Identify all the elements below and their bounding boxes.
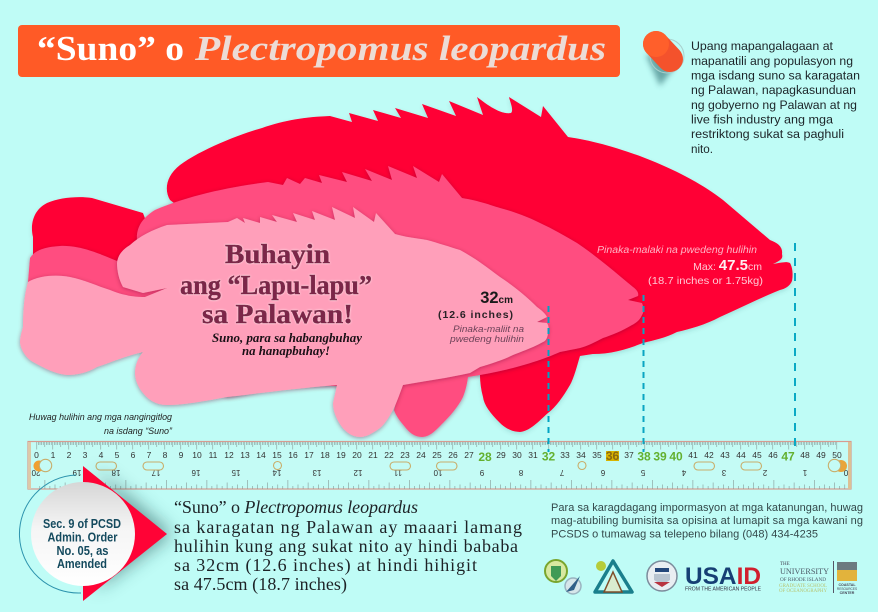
intro paragraph: mapanatili ang populasyon ng xyxy=(691,54,853,68)
ruler centimetre numbers: 21 xyxy=(368,450,378,460)
ruler centimetre numbers: 44 xyxy=(736,450,746,460)
ruler centimetre numbers: 12 xyxy=(224,450,234,460)
ruler slots and holes xyxy=(34,459,847,472)
campaign headline: Suno, para sa habangbuhay xyxy=(212,331,362,345)
label: minimum size 32cm: Pinaka-maliit na xyxy=(453,324,524,335)
contact information: PCSDS o tumawag sa telepeno bilang (048) 434-4235 xyxy=(551,528,818,540)
regulation text: sa 47.5cm (18.7 inches) xyxy=(174,574,347,595)
logo: University of Rhode Island xyxy=(779,561,834,594)
ruler inch numbers, upside down: 9 xyxy=(479,468,484,477)
badge: legal reference xyxy=(19,466,172,601)
ruler inch numbers, upside down: 10 xyxy=(433,468,442,477)
ruler inch numbers, upside down: 15 xyxy=(231,468,240,477)
ruler inch numbers, upside down: 13 xyxy=(312,468,321,477)
ruler centimetre numbers: 39 xyxy=(653,450,667,464)
logo: Coastal Resources Center: RESOURCES xyxy=(837,587,857,591)
fish: middle silhouette xyxy=(28,166,644,437)
ruler centimetre numbers: 7 xyxy=(147,450,152,460)
note above ruler xyxy=(29,412,173,437)
intro paragraph: restriktong sukat sa paghuli xyxy=(691,127,844,141)
ruler centimetre numbers: 17 xyxy=(304,450,314,460)
note above ruler: Huwag hulihin ang mga nangingitlog xyxy=(29,412,173,423)
ruler centimetre numbers: 9 xyxy=(179,450,184,460)
ruler inch numbers, upside down: 3 xyxy=(721,468,726,477)
title banner xyxy=(18,25,620,77)
logo: Coastal Resources Center: CENTER xyxy=(840,591,855,595)
logo: University of Rhode Island: OF RHODE ISLAND xyxy=(780,577,826,583)
ruler centimetre numbers: 32 xyxy=(542,450,555,464)
badge: legal reference: Amended xyxy=(57,557,107,571)
ruler inch numbers, upside down: 16 xyxy=(191,468,200,477)
badge: legal reference: No. 05, as xyxy=(56,544,109,558)
ruler centimetre numbers: 10 xyxy=(192,450,202,460)
intro paragraph xyxy=(691,39,860,156)
fish: smallest silhouette 32cm xyxy=(20,207,549,437)
ruler inch numbers, upside down: 8 xyxy=(518,468,523,477)
ruler centimetre numbers: 27 xyxy=(464,450,474,460)
ruler centimetre numbers: 6 xyxy=(131,450,136,460)
logo: Coastal Resources Center xyxy=(837,562,857,595)
ruler centimetre numbers: 45 xyxy=(752,450,762,460)
ruler centimetre numbers: 43 xyxy=(720,450,730,460)
ruler inch numbers, upside down: 11 xyxy=(393,468,402,477)
logo: University of Rhode Island: THE xyxy=(780,562,790,567)
contact information: mag-atubiling bumisita sa opisina at lumapit sa mga kawani ng xyxy=(551,515,863,527)
intro paragraph: ng Palawan, napagkasunduan xyxy=(691,83,856,97)
ruler inch numbers, upside down: 19 xyxy=(72,468,81,477)
ruler xyxy=(28,442,851,489)
ruler centimetre numbers: 35 xyxy=(592,450,602,460)
ruler centimetre numbers: 11 xyxy=(209,450,218,460)
title banner: “Suno” o xyxy=(37,29,184,68)
title banner: Plectropomus leopardus xyxy=(194,29,606,68)
ruler centimetre numbers: 25 xyxy=(432,450,442,460)
regulation text: sa 32cm (12.6 inches) at hindi hihigit xyxy=(174,555,477,576)
ruler centimetre numbers: 8 xyxy=(163,450,168,460)
ruler centimetre numbers: 20 xyxy=(352,450,362,460)
intro paragraph: Upang mapangalagaan at xyxy=(691,39,834,53)
ruler centimetre numbers: 28 xyxy=(478,450,492,464)
ruler centimetre numbers: 40 xyxy=(669,450,683,464)
ruler centimetre numbers: 2 xyxy=(67,450,72,460)
contact information xyxy=(551,502,863,540)
ruler centimetre numbers xyxy=(34,449,842,464)
regulation text: sa karagatan ng Palawan ay maaari lamang xyxy=(174,517,522,537)
logo: USAID: USAID xyxy=(685,563,761,590)
ruler centimetre numbers: 49 xyxy=(816,450,826,460)
ruler centimetre numbers: 42 xyxy=(704,450,714,460)
logo: University of Rhode Island: UNIVERSITY xyxy=(780,566,829,576)
ruler inch numbers, upside down: 12 xyxy=(353,468,362,477)
label: maximum size 47.5cm: (18.7 inches or 1.75kg) xyxy=(648,275,763,287)
ruler inch numbers, upside down: 20 xyxy=(31,468,40,477)
ruler inch numbers, upside down: 18 xyxy=(111,468,120,477)
ruler centimetre numbers: 19 xyxy=(336,450,346,460)
ruler inch numbers, upside down: 7 xyxy=(559,468,564,477)
regulation text: “Suno” o Plectropomus leopardus xyxy=(174,497,418,517)
ruler inch numbers, upside down: 17 xyxy=(151,468,160,477)
campaign headline: na hanapbuhay! xyxy=(242,344,330,358)
ruler centimetre numbers: 4 xyxy=(99,450,104,460)
label: minimum size 32cm: 32cm xyxy=(480,289,513,307)
label: minimum size 32cm: pwedeng hulihin xyxy=(449,334,524,345)
ruler inch numbers, upside down: 2 xyxy=(762,468,767,477)
ruler centimetre numbers: 29 xyxy=(496,450,506,460)
ruler inch numbers, upside down xyxy=(31,468,848,477)
ruler centimetre numbers: 22 xyxy=(384,450,394,460)
ruler centimetre numbers: 37 xyxy=(624,450,634,460)
logo: green triangle xyxy=(595,561,632,592)
ruler centimetre numbers: 38 xyxy=(637,450,651,464)
campaign headline: ang “Lapu-lapu” xyxy=(180,270,372,300)
ruler centimetre numbers: 36 xyxy=(606,449,619,463)
intro paragraph: mga isdang suno sa karagatan xyxy=(691,68,860,82)
ruler inch numbers, upside down: 1 xyxy=(802,468,807,477)
measurement guide lines xyxy=(548,243,795,452)
logo: University of Rhode Island: OF OCEANOGRAPHY xyxy=(779,589,828,594)
ruler centimetre numbers: 1 xyxy=(51,450,56,460)
ruler centimetre numbers: 26 xyxy=(448,450,458,460)
ruler centimetre numbers: 33 xyxy=(560,450,570,460)
ruler inch numbers, upside down: 0 xyxy=(843,468,848,477)
ruler centimetre numbers: 24 xyxy=(416,450,426,460)
ruler centimetre numbers: 46 xyxy=(768,450,778,460)
ruler centimetre numbers: 3 xyxy=(83,450,88,460)
ruler centimetre numbers: 30 xyxy=(512,450,522,460)
note above ruler: na isdang “Suno” xyxy=(104,426,173,437)
ruler centimetre numbers: 0 xyxy=(34,450,39,460)
regulation text xyxy=(174,497,522,595)
ruler centimetre numbers: 16 xyxy=(288,450,298,460)
badge: legal reference: Admin. Order xyxy=(48,530,118,544)
ruler inch numbers, upside down: 14 xyxy=(272,468,281,477)
intro paragraph: ng gobyerno ng Palawan at ng xyxy=(691,98,857,112)
contact information: Para sa karagdagang impormasyon at mga katanungan, huwag xyxy=(551,502,863,514)
campaign headline: sa Palawan! xyxy=(202,299,353,329)
ruler centimetre numbers: 31 xyxy=(528,450,538,460)
ruler inch numbers, upside down: 4 xyxy=(681,468,686,477)
intro paragraph: nito. xyxy=(691,142,713,156)
label: maximum size 47.5cm: Pinaka-malaki na pwedeng hulihin xyxy=(597,245,757,256)
ruler centimetre numbers: 15 xyxy=(272,450,282,460)
logo: University of Rhode Island: GRADUATE SCHOOL xyxy=(779,584,827,589)
ruler centimetre numbers: 5 xyxy=(115,450,120,460)
logo: USAID: FROM THE AMERICAN PEOPLE xyxy=(685,586,762,592)
fish: largest silhouette 47.5cm xyxy=(32,97,793,432)
ruler centimetre numbers: 14 xyxy=(256,450,266,460)
regulation text: hulihin kung ang sukat nito ay hindi bababa xyxy=(174,536,518,556)
ruler centimetre numbers: 18 xyxy=(320,450,330,460)
logo: agriculture seal xyxy=(545,560,581,594)
icon: orange capsule bullet xyxy=(643,31,684,86)
ruler inch numbers, upside down: 5 xyxy=(640,468,645,477)
campaign headline: Buhayin xyxy=(225,239,330,269)
badge: legal reference: Sec. 9 of PCSD xyxy=(43,517,121,531)
ruler centimetre numbers: 47 xyxy=(781,450,795,464)
ruler centimetre numbers: 34 xyxy=(576,450,586,460)
ruler centimetre numbers: 50 xyxy=(832,450,842,460)
label: minimum size 32cm xyxy=(438,289,524,345)
campaign headline xyxy=(180,239,372,358)
intro paragraph: live fish industry ang mga xyxy=(691,112,833,126)
ruler centimetre numbers: 13 xyxy=(240,450,250,460)
ruler centimetre numbers: 48 xyxy=(800,450,810,460)
ruler inch numbers, upside down: 6 xyxy=(600,468,605,477)
ruler centimetre numbers: 41 xyxy=(688,450,698,460)
label: minimum size 32cm: (12.6 inches) xyxy=(438,309,513,321)
ruler centimetre numbers: 23 xyxy=(400,450,410,460)
label: maximum size 47.5cm: Max: 47.5cm xyxy=(693,257,762,274)
label: maximum size 47.5cm xyxy=(597,245,763,287)
logo: Coastal Resources Center: COASTAL xyxy=(838,583,856,587)
logo: USAID xyxy=(647,561,762,592)
